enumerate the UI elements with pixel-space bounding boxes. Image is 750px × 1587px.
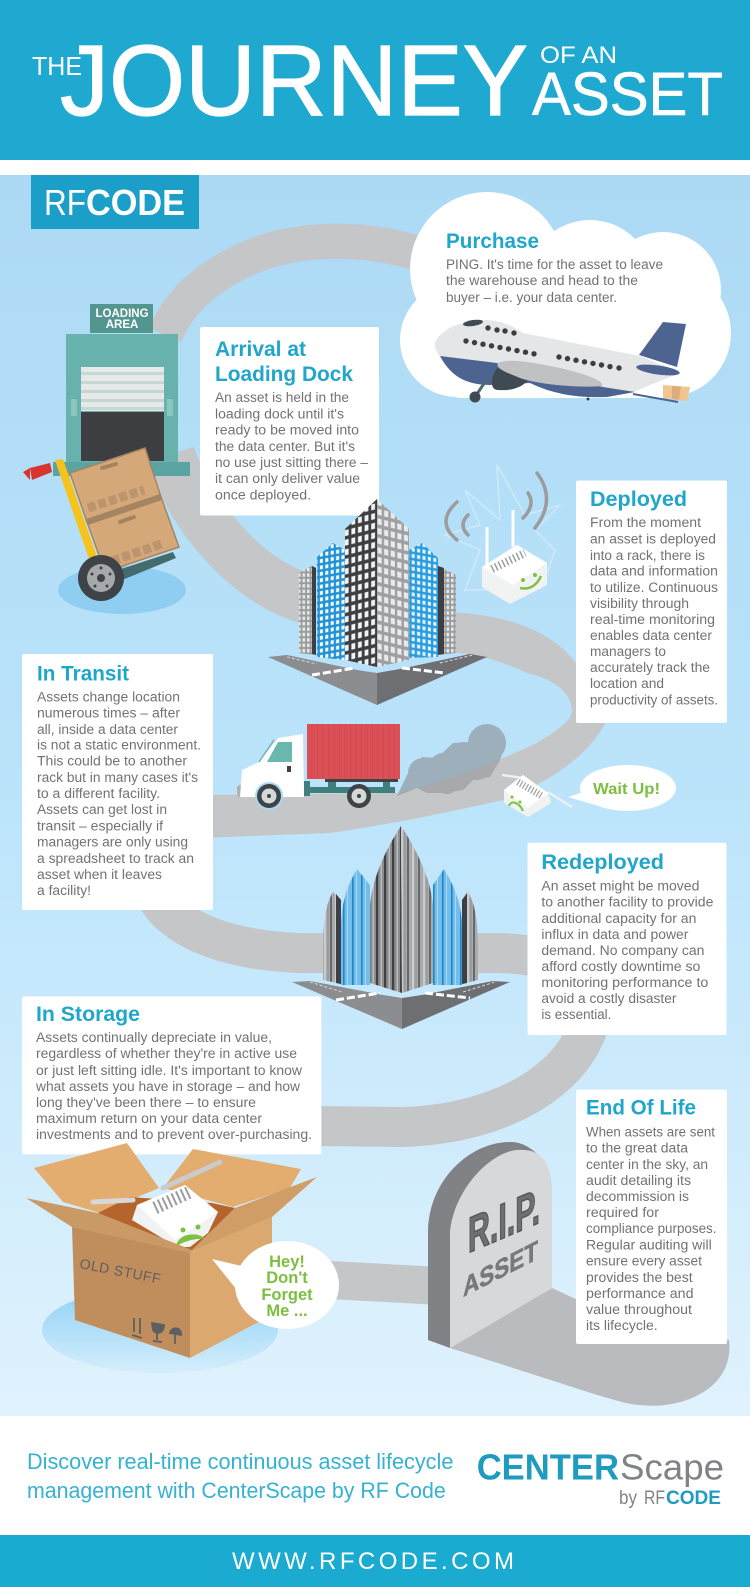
icon: airplane <box>435 319 690 402</box>
arrival text: it can only deliver value <box>215 471 360 486</box>
panel: purchase <box>400 192 731 398</box>
header banner <box>0 0 750 160</box>
redeployed text: avoid a costly disaster <box>541 991 677 1006</box>
redeployed text: influx in data and power <box>541 927 689 942</box>
icon: sad asset tag <box>502 775 572 817</box>
end of life text: center in the sky, an <box>586 1157 708 1172</box>
purchase text: the warehouse and head to the <box>446 273 638 288</box>
deployed text: accurately track the <box>590 660 710 675</box>
redeployed text: demand. No company can <box>541 943 704 958</box>
arrival text: An asset is held in the <box>215 390 349 405</box>
title: OF AN <box>540 42 617 69</box>
redeployed text: is essential. <box>541 1007 611 1022</box>
in transit heading: In Transit <box>37 662 129 685</box>
logo: CenterScape by RF Code: CENTER <box>477 1446 619 1487</box>
title <box>32 25 723 137</box>
deployed text: managers to <box>590 644 666 659</box>
end of life text: ensure every asset <box>586 1254 702 1269</box>
end of life text: compliance purposes. <box>586 1221 716 1236</box>
in storage text: investments and to prevent over-purchasing. <box>36 1127 312 1142</box>
icon: loading dock <box>53 304 190 476</box>
smoke <box>397 724 506 796</box>
purchase text: PING. It's time for the asset to leave <box>446 257 663 272</box>
end of life text: When assets are sent <box>586 1125 715 1140</box>
logo: CenterScape by RF Code: Scape <box>620 1446 724 1487</box>
deployed heading: Deployed <box>590 488 687 511</box>
in transit text: asset when it leaves <box>37 867 162 882</box>
in transit text: Assets can get lost in <box>37 802 167 817</box>
arrival text: no use just sitting there – <box>215 455 368 470</box>
end of life text: value throughout <box>586 1302 692 1317</box>
footer banner: website: WWW.RFCODE.COM <box>232 1548 514 1575</box>
in storage text: what assets you have in storage – and how <box>35 1079 300 1094</box>
loading area sign <box>90 304 153 333</box>
deployed text <box>590 515 718 707</box>
logo: CenterScape by RF Code <box>477 1446 724 1509</box>
in storage text: regardless of whether they're in active use <box>36 1046 297 1061</box>
end of life text: Regular auditing will <box>586 1238 712 1252</box>
in transit text: all, inside a data center <box>37 722 179 737</box>
callout: hey don't forget me: Hey! <box>269 1253 305 1271</box>
panel: arrival at loading dock <box>200 327 379 516</box>
icon: gravestone with shadow <box>428 1142 729 1406</box>
icon: city towers <box>268 499 487 705</box>
redeployed text: An asset might be moved <box>541 878 699 893</box>
end of life text: decommission is <box>586 1189 689 1204</box>
in transit text: This could be to another <box>37 754 188 769</box>
arrival text: once deployed. <box>215 488 311 503</box>
panel: deployed <box>576 480 727 723</box>
arrival text <box>215 390 368 503</box>
gravestone text: ASSET <box>463 1235 538 1304</box>
deployed text: into a rack, there is <box>590 548 705 563</box>
in transit text <box>37 690 201 898</box>
callout: hey don't forget me: Don't <box>266 1269 308 1287</box>
redeployed text <box>541 878 713 1022</box>
end of life text: audit detailing its <box>586 1173 691 1188</box>
sky background <box>0 175 750 1416</box>
footer call to action <box>27 1449 453 1503</box>
purchase heading: Purchase <box>446 230 539 253</box>
arrival text: ready to be moved into <box>215 423 359 438</box>
road junction 2 <box>292 981 510 1029</box>
callout: wait up <box>568 765 676 811</box>
redeployed text: afford costly downtime so <box>541 959 700 974</box>
icon: striped towers <box>292 826 510 1029</box>
callout: hey don't forget me: Forget <box>261 1286 313 1304</box>
panel: end of life <box>576 1090 727 1344</box>
logo: CenterScape by RF Code: CODE <box>666 1488 721 1509</box>
end of life text: to the great data <box>586 1141 689 1156</box>
in transit text: managers are only using <box>37 835 188 850</box>
winding road <box>150 241 611 1286</box>
callout: hey don't forget me: Me ... <box>266 1302 308 1320</box>
deployed text: visibility through <box>590 596 689 611</box>
deployed text: an asset is deployed <box>590 532 716 546</box>
in transit text: Assets change location <box>37 690 180 705</box>
in transit text: transit – especially if <box>37 818 163 834</box>
icon: box handling marks <box>132 1318 181 1344</box>
in storage text: Assets continually depreciate in value, <box>36 1030 272 1045</box>
asset tag in box <box>93 1162 220 1247</box>
end of life text: required for <box>586 1205 660 1220</box>
deployed text: to utilize. Continuous <box>590 580 718 595</box>
title: JOURNEY <box>60 25 528 137</box>
footer call to action: management with CenterScape by RF Code <box>27 1478 446 1503</box>
logo: CenterScape by RF Code: by <box>619 1488 637 1509</box>
in storage text: or just left sitting idle. It's important to know <box>36 1063 302 1078</box>
footer call to action: Discover real-time continuous asset lifecycle <box>27 1449 453 1474</box>
deployed text: productivity of assets. <box>590 692 718 707</box>
gravestone text: R.I.P. <box>468 1178 540 1264</box>
arrival heading: Loading Dock <box>215 363 353 386</box>
title: ASSET <box>532 60 723 128</box>
deployed text: real-time monitoring <box>590 612 715 627</box>
icon: cardboard box <box>26 1143 317 1373</box>
end of life text: provides the best <box>586 1270 693 1285</box>
in transit text: to a different facility. <box>37 786 160 801</box>
deployed text: enables data center <box>590 628 713 643</box>
end of life text: performance and <box>586 1286 694 1301</box>
callout: wait up: Wait Up! <box>593 781 660 798</box>
in transit text: a spreadsheet to track an <box>37 851 194 866</box>
arrival text: loading dock until it's <box>215 406 344 422</box>
redeployed text: monitoring performance to <box>541 975 708 990</box>
gravestone text <box>463 1178 540 1304</box>
redeployed text: to another facility to provide <box>541 894 713 910</box>
arrival heading: Arrival at <box>215 338 306 361</box>
end of life text: its lifecycle. <box>586 1318 658 1333</box>
cloud <box>400 192 731 398</box>
in storage text: long they've been there – to ensure <box>36 1095 256 1110</box>
in transit text: rack but in many cases it's <box>37 770 198 785</box>
logo: RF Code <box>31 175 199 229</box>
title: THE <box>32 51 82 81</box>
purchase text <box>446 257 663 305</box>
panel: in storage <box>22 996 321 1154</box>
icon: happy asset tag with signal <box>445 465 560 604</box>
panel: redeployed <box>528 843 726 1035</box>
redeployed text: additional capacity for an <box>541 911 696 926</box>
panel: in transit <box>22 654 213 910</box>
icon: hand truck with boxes <box>23 448 186 614</box>
road junction <box>268 654 487 705</box>
callout: hey don't forget me <box>212 1241 339 1329</box>
end of life heading: End Of Life <box>586 1096 696 1119</box>
in storage text <box>35 1030 312 1142</box>
arrival text: the data center. But it's <box>215 439 355 454</box>
redeployed heading: Redeployed <box>541 851 664 874</box>
loading area sign: AREA <box>106 319 138 331</box>
footer banner: website <box>0 1535 750 1587</box>
in storage text: maximum return on your data center <box>36 1111 263 1126</box>
deployed text: From the moment <box>590 515 701 530</box>
loading area sign: LOADING <box>95 308 149 320</box>
in transit text: numerous times – after <box>37 706 181 721</box>
logo: RF Code: CODE <box>86 182 185 223</box>
logo: CenterScape by RF Code: RF <box>644 1488 665 1509</box>
logo: RF Code: RF <box>44 182 86 223</box>
end of life text <box>586 1125 716 1333</box>
icon: delivery truck with smoke <box>237 724 506 810</box>
in transit text: is not a static environment. <box>37 738 201 753</box>
deployed text: location and <box>590 676 664 691</box>
deployed text: data and information <box>590 564 718 579</box>
in transit text: a facility! <box>37 883 91 898</box>
arrival heading <box>215 338 353 386</box>
box label: OLD STUFF <box>78 1255 164 1287</box>
purchase text: buyer – i.e. your data center. <box>446 290 617 305</box>
in storage heading: In Storage <box>36 1003 140 1026</box>
